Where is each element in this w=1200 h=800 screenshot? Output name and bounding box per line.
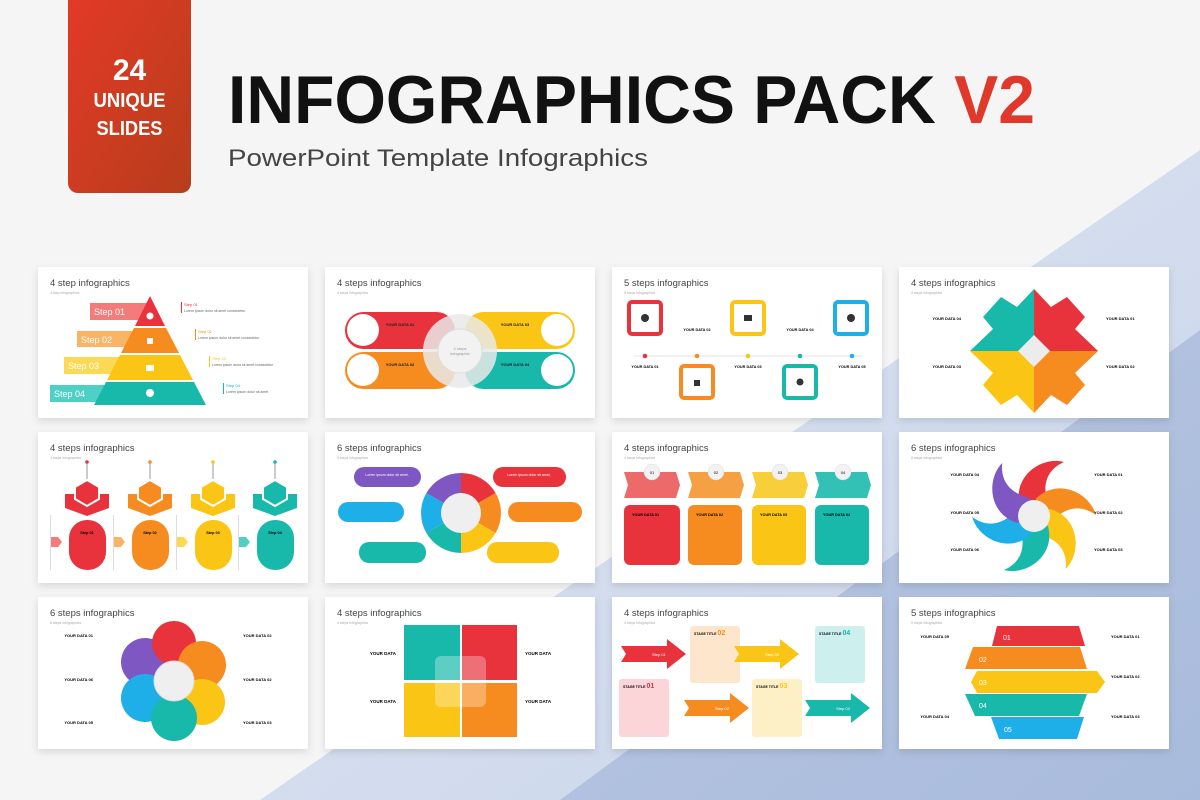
card 11: arrows and stages: STAGE TITLE 03 [756,683,787,690]
card 12: hexagon bands: 05 [1004,727,1012,734]
card 4: X arrows: 4 steps infographics [911,278,996,289]
card 11: arrows and stages: Step 01 [652,652,667,657]
card 7: chevrons with boxes: 03 [778,470,783,475]
card 3: 5 steps timeline: YOUR DATA 04 [786,328,814,332]
card 10: 2x2 squares: YOUR DATA [370,699,397,704]
card 12: hexagon bands [899,597,1169,749]
card 10: 2x2 squares: 4 steps infographics [337,621,368,625]
card 7: chevrons with boxes: 4 steps infographics [624,443,709,454]
card 5: hexagon columns: Step 03 [206,531,220,535]
badge: SLIDES [96,118,162,140]
card 1: pyramid: Step 04 [226,383,241,388]
card 4: X arrows: YOUR DATA 01 [1106,316,1135,321]
card 4: X arrows: YOUR DATA 02 [1106,364,1135,369]
card 12: hexagon bands: 03 [979,680,987,687]
card 9: flower: YOUR DATA 05 [64,720,94,725]
badge [68,0,191,193]
badge: 24 [113,54,146,87]
card 8: spiral: YOUR DATA 05 [950,510,980,515]
card 4: X arrows: YOUR DATA 03 [932,364,962,369]
card 3: 5 steps timeline: 5 steps infographics [624,291,655,295]
card 7: chevrons with boxes: 4 steps infographics [624,456,655,460]
card 8: spiral: YOUR DATA 04 [950,472,980,477]
card 1: pyramid: Step 02 [81,335,112,345]
card 2: pills: 4 steps infographics [337,278,422,289]
card 2: pills [325,267,595,418]
card 5: hexagon columns: Step 04 [268,531,283,535]
card 9: flower: YOUR DATA 01 [64,633,94,638]
badge: UNIQUE [94,90,166,112]
card 1: pyramid [38,267,308,418]
card 8: spiral [899,432,1169,583]
card 7: chevrons with boxes: YOUR DATA 04 [823,513,851,517]
card 12: hexagon bands: YOUR DATA 04 [920,714,950,719]
card 12: hexagon bands: 01 [1003,635,1011,642]
card 11: arrows and stages: Step 04 [836,706,851,711]
card 1: pyramid: 4 step infographics [50,278,130,289]
card 1: pyramid: 4 step infographics [50,291,80,295]
card 7: chevrons with boxes: 02 [714,470,719,475]
card 3: 5 steps timeline: YOUR DATA 02 [683,328,711,332]
card 4: X arrows [899,267,1169,418]
card 5: hexagon columns: Step 02 [143,531,157,535]
card 12: hexagon bands: YOUR DATA 01 [1111,634,1140,639]
card 2: pills: YOUR DATA 04 [501,362,530,367]
card 12: hexagon bands: YOUR DATA 05 [920,634,950,639]
card 2: pills: 4 steps [454,346,466,351]
card 1: pyramid: Lorem ipsum dolor sit amet consectetur [212,363,274,367]
card 12: hexagon bands: 5 steps infographics [911,608,996,619]
card 7: chevrons with boxes: YOUR DATA 03 [760,513,787,517]
card 7: chevrons with boxes: 01 [650,470,655,475]
card 6: ring with bubbles: Lorem ipsum dolor sit amet, [507,473,551,477]
card 8: spiral: YOUR DATA 06 [950,547,980,552]
card 6: ring with bubbles: Lorem ipsum dolor sit amet, [365,473,409,477]
card 9: flower: 6 steps infographics [50,608,135,619]
card 11: arrows and stages: STAGE TITLE 01 [623,683,654,690]
card 1: pyramid: Step 04 [54,389,85,399]
card 10: 2x2 squares: 4 steps infographics [337,608,422,619]
card 12: hexagon bands: 5 steps infographics [911,621,942,625]
card 11: arrows and stages: STAGE TITLE 02 [694,630,725,637]
card 9: flower: 6 steps infographics [50,621,81,625]
card 9: flower: YOUR DATA 02 [243,633,272,638]
card 1: pyramid: Step 01 [184,302,199,307]
card 4: X arrows: 4 steps infographics [911,291,942,295]
card 11: arrows and stages: STAGE TITLE 04 [819,630,850,637]
card 5: hexagon columns: 4 steps infographics [50,456,81,460]
card 7: chevrons with boxes [612,432,882,583]
card 1: pyramid: Lorem ipsum dolor sit amet consectetur [184,309,246,313]
card 7: chevrons with boxes: YOUR DATA 02 [696,513,723,517]
card 10: 2x2 squares: YOUR DATA [370,651,397,656]
card 3: 5 steps timeline: YOUR DATA 03 [734,365,762,369]
card 7: chevrons with boxes: YOUR DATA 01 [632,513,659,517]
card 1: pyramid: Step 02 [198,329,213,334]
card 9: flower: YOUR DATA 06 [64,677,94,682]
card 5: hexagon columns [38,432,308,583]
card 8: spiral: YOUR DATA 01 [1094,472,1123,477]
card 9: flower: YOUR DATA 03 [243,720,272,725]
card 11: arrows and stages: Step 03 [765,652,780,657]
card 8: spiral: YOUR DATA 03 [1094,547,1123,552]
card 1: pyramid: Lorem ipsum dolor sit amet consectetur [198,336,260,340]
card 8: spiral: 6 steps infographics [911,456,942,460]
card 6: ring with bubbles: 6 steps infographics [337,443,422,454]
card 3: 5 steps timeline [612,267,882,418]
card 12: hexagon bands: 04 [979,703,987,710]
card 7: chevrons with boxes: 04 [841,470,846,475]
card 8: spiral: YOUR DATA 02 [1094,510,1123,515]
card 3: 5 steps timeline: YOUR DATA 01 [631,365,659,369]
card 1: pyramid: Step 03 [212,356,227,361]
subtitle: PowerPoint Template Infographics [228,145,648,172]
card 11: arrows and stages: 4 steps infographics [624,621,655,625]
card 4: X arrows: YOUR DATA 04 [932,316,962,321]
card 11: arrows and stages: 4 steps infographics [624,608,709,619]
card 6: ring with bubbles: 6 steps infographics [337,456,368,460]
card 9: flower: YOUR DATA 02 [243,677,272,682]
card 10: 2x2 squares [325,597,595,749]
card 10: 2x2 squares: YOUR DATA [525,699,552,704]
card 2: pills: YOUR DATA 03 [501,322,530,327]
card 8: spiral: 6 steps infographics [911,443,996,454]
card 11: arrows and stages: Step 02 [715,706,730,711]
card 2: pills: 4 steps infographics [337,291,368,295]
card 12: hexagon bands: 02 [979,657,987,664]
card 10: 2x2 squares: YOUR DATA [525,651,552,656]
card 2: pills: YOUR DATA 02 [386,362,415,367]
card 2: pills: YOUR DATA 01 [386,322,415,327]
card 3: 5 steps timeline: 5 steps infographics [624,278,709,289]
card 9: flower [38,597,308,749]
card 12: hexagon bands: YOUR DATA 02 [1111,674,1140,679]
card 3: 5 steps timeline: YOUR DATA 05 [838,365,866,369]
card 5: hexagon columns: Step 01 [80,531,94,535]
card 1: pyramid: Step 01 [94,307,125,317]
card 5: hexagon columns: 4 steps infographics [50,443,135,454]
card 11: arrows and stages [612,597,882,749]
card 1: pyramid: Step 03 [68,361,99,371]
card 6: ring with bubbles [325,432,595,583]
card 12: hexagon bands: YOUR DATA 03 [1111,714,1140,719]
title: INFOGRAPHICS PACK V2 [228,62,1035,138]
card 1: pyramid: Lorem ipsum dolor sit amet [226,390,268,394]
card 2: pills: infographic [450,351,470,356]
